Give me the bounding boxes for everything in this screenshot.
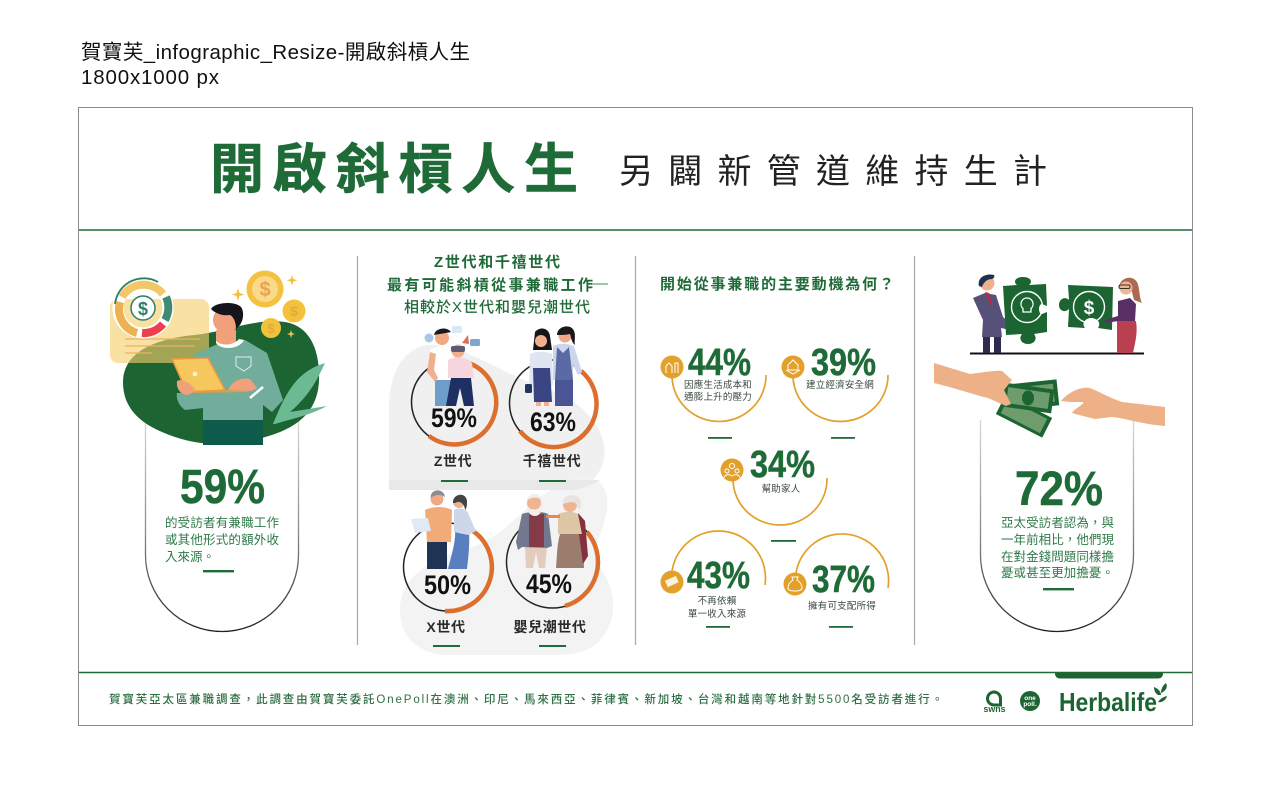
description: 憂或甚至更加擔憂。 [1001,566,1114,580]
logo: Herbalife [1055,672,1167,717]
stat: 72%: 72% [1015,463,1103,516]
motivation: 39% [782,342,888,439]
logo: Herbalife: Herbalife [1059,687,1157,717]
file name heading: 1800x1000 px [81,66,220,89]
logo: swns: swns [984,704,1006,714]
panel: generations [387,253,613,655]
panel: 59% have side jobs [110,270,327,632]
description: 或其他形式的額外收 [165,532,279,547]
label: 千禧世代 [523,453,581,469]
description: 一年前相比，他們現 [1001,532,1114,547]
title [210,140,1047,200]
illustration: man with laptop: $ [138,299,148,319]
panel: 72% worry [934,275,1165,632]
motivation: 39%: 39% [811,342,876,384]
title: 另闢新管道維持生計 [619,153,1047,191]
icon: budget gauge [115,278,168,333]
logos [984,672,1167,717]
illustration: Gen Z couple [424,326,480,406]
icon: coins [232,270,306,338]
motivation: 44%: 通膨上升的壓力 [684,391,752,403]
description: 亞太受訪者認為，與 [1001,515,1114,530]
illustration: man with laptop [110,270,327,445]
icon: coins: $ [267,321,275,336]
value: 63% [530,407,576,437]
chart: Gen Z 59% [412,326,496,482]
motivation: 43%: 43% [687,555,750,597]
illustration: Gen X couple [411,490,476,569]
description [165,515,279,564]
chart: Gen X 50% [404,490,492,647]
title: 開啟斜槓人生 [210,140,578,200]
value: 59% [431,403,477,433]
illustration: Millennial couple [525,326,582,406]
panel: motivations [660,275,894,628]
icon: coins: $ [290,303,298,319]
chart: Boomers 45% [506,494,598,647]
capsule outline [980,420,1134,632]
background blobs [389,345,604,490]
illustration: business partners with puzzle: $ [1084,298,1095,319]
heading: 開始從事兼職的主要動機為何？ [660,275,894,293]
chart: Millennials 63% [510,326,597,482]
logo: onepoll: one [1024,695,1036,702]
heading: 最有可能斜槓從事兼職工作 [387,276,593,294]
capsule outline [146,420,298,632]
description: 入來源。 [165,550,215,564]
motivation: 43% [660,531,766,628]
motivation: 37%: 37% [812,559,875,601]
motivation: 44% [660,342,766,439]
file name heading [81,41,470,89]
motivation: 34%: 34% [750,444,815,486]
motivation: 37%: 擁有可支配所得 [808,600,876,612]
motivation: 43%: 不再依賴 [698,595,737,607]
logo: onepoll: poll. [1023,701,1037,708]
illustration: Boomer couple [516,494,588,568]
description: 的受訪者有兼職工作 [165,515,279,530]
description: 在對金錢問題同樣擔 [1001,549,1114,564]
outer frame [78,108,1192,726]
motivation: 34% [720,444,827,542]
heading: 相較於X世代和嬰兒潮世代 [404,298,590,316]
illustration: business partners with puzzle [970,275,1144,354]
label: Z世代 [434,453,472,469]
motivation: 39%: 建立經濟安全網 [806,379,874,391]
motivation: 44%: 因應生活成本和 [684,379,752,391]
description [1001,515,1114,580]
footer note: 賀寶芙亞太區兼職調查，此調查由賀寶芙委託OnePoll在澳洲、印尼、馬來西亞、菲律賓、新加坡、台灣和越南等地針對5500名受訪者進行。 [109,692,943,706]
motivation: 43%: 單一收入來源 [688,608,746,620]
label: 嬰兒潮世代 [514,619,586,635]
logo: onepoll [1020,691,1040,711]
motivation: 37% [784,534,889,628]
motivation: 34%: 幫助家人 [762,483,801,495]
value: 50% [424,570,471,600]
icon: coins: $ [259,279,271,301]
stat: 59%: 59% [180,461,265,514]
heading [387,253,593,316]
label: X世代 [426,619,466,635]
heading: Z世代和千禧世代 [434,253,560,271]
file name heading: 賀寶芙_infographic_Resize-開啟斜槓人生 [81,41,470,64]
logo: swns [984,692,1006,714]
illustration: hands exchanging money [934,363,1165,438]
value: 45% [526,569,572,599]
motivation: 44%: 44% [688,342,751,384]
